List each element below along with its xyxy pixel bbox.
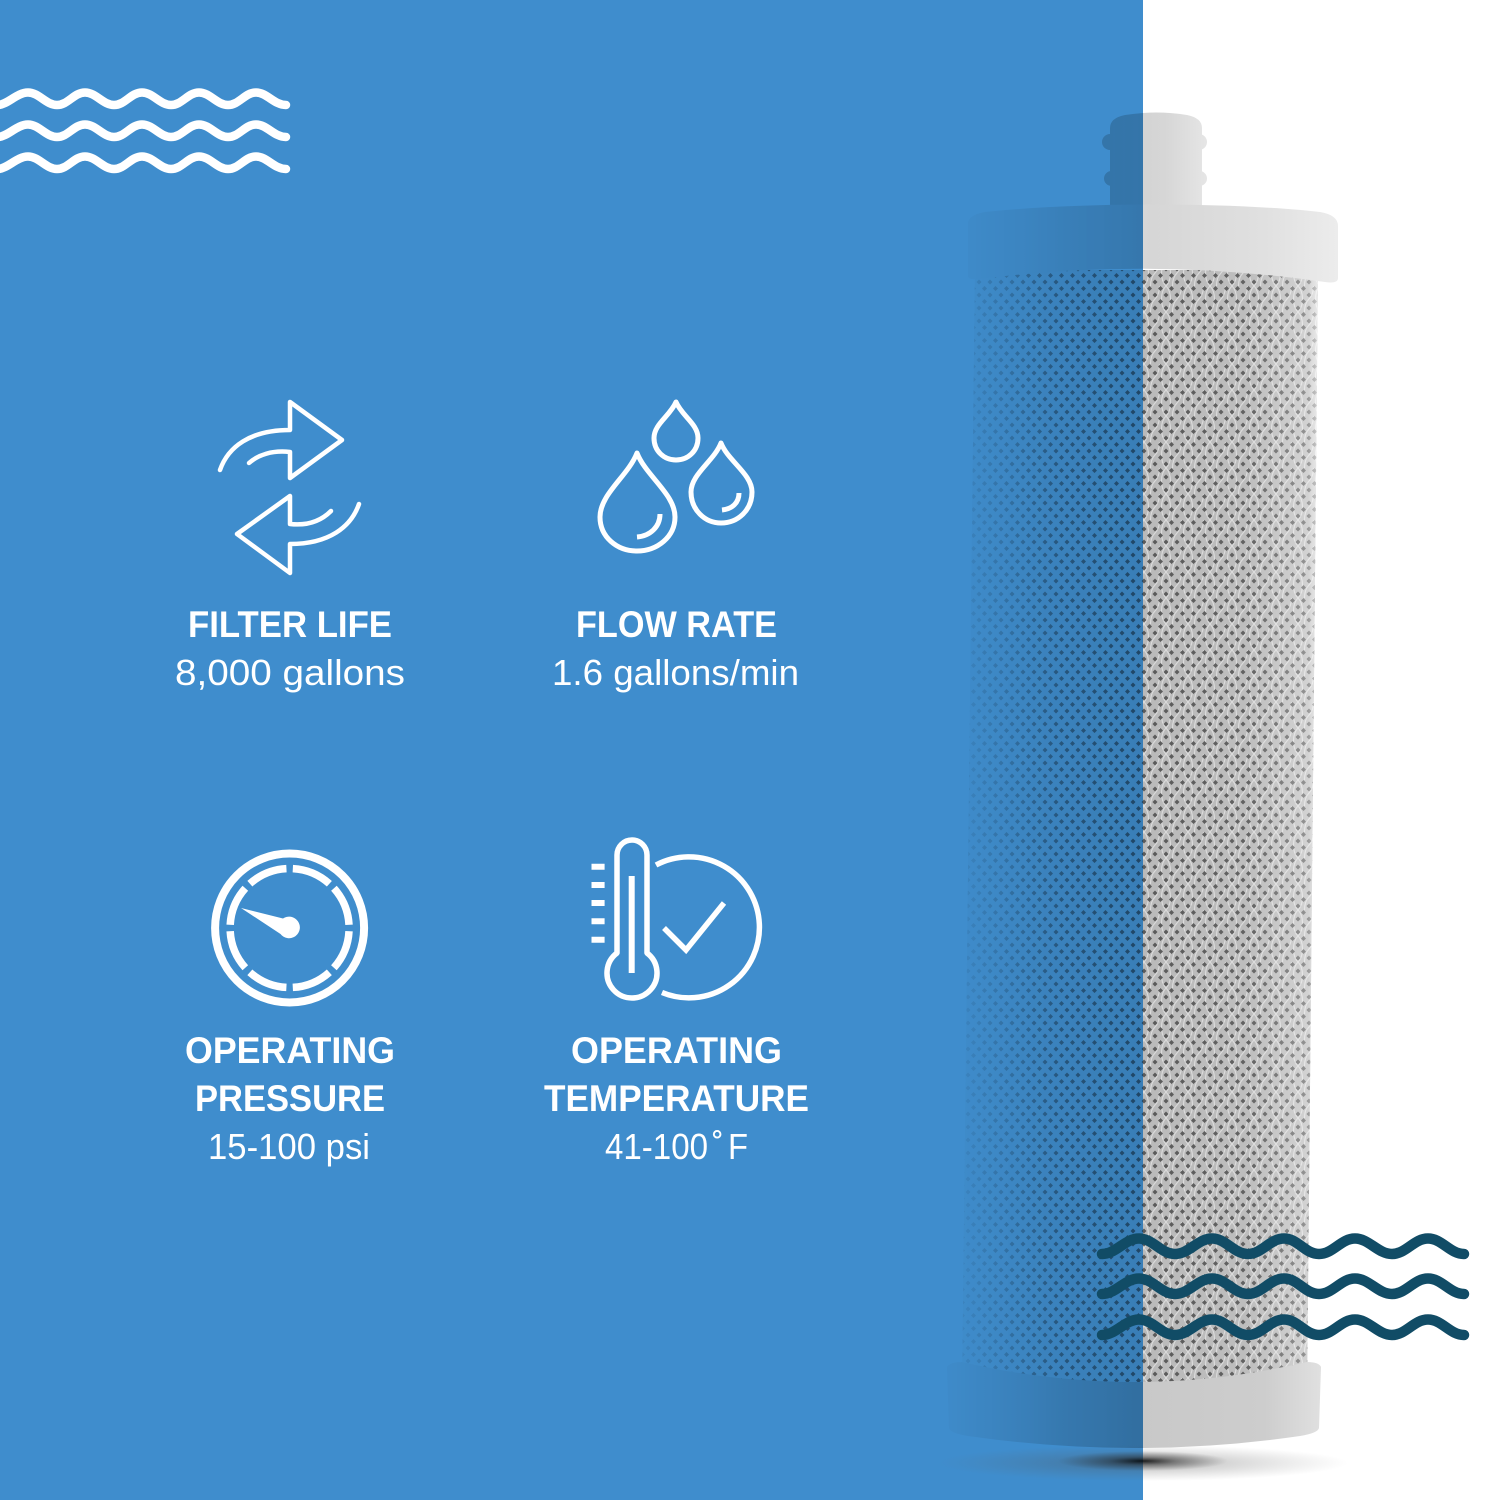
title: flow rate: 1.6 gallons/min (552, 652, 799, 693)
title: filter life: 8,000 gallons (175, 652, 405, 693)
title: operating temperature: F (728, 1126, 748, 1167)
title: filter life (175, 604, 405, 693)
icon: thermometer with check (592, 840, 759, 998)
icon: water drops (flow rate) (600, 402, 752, 551)
title: filter life: FILTER LIFE (188, 604, 392, 645)
title: operating temperature: ˚ (712, 1126, 724, 1167)
title: operating pressure: PRESSURE (195, 1078, 385, 1119)
filter cartridge, blue tinted half (962, 113, 1143, 1448)
title: operating pressure: OPERATING (185, 1030, 395, 1071)
title: flow rate: FLOW RATE (576, 604, 777, 645)
filter shadow (938, 1445, 1348, 1481)
decorative waves: dark teal, bottom right (1102, 1238, 1464, 1335)
title: operating temperature: 41-100 (605, 1126, 708, 1167)
title: operating temperature: TEMPERATURE (544, 1078, 809, 1119)
icon: pressure gauge (215, 854, 364, 1002)
title: operating pressure (185, 1030, 395, 1167)
decorative waves: white, top left (0, 92, 286, 169)
title: flow rate (552, 604, 799, 693)
filter cartridge, natural half (1143, 112, 1338, 1448)
title: operating temperature (544, 1030, 809, 1167)
title: operating pressure: 15-100 psi (208, 1126, 370, 1167)
blue panel (0, 0, 1143, 1500)
title: operating temperature: OPERATING (571, 1030, 782, 1071)
icon: recycling arrows (filter life) (220, 402, 359, 573)
